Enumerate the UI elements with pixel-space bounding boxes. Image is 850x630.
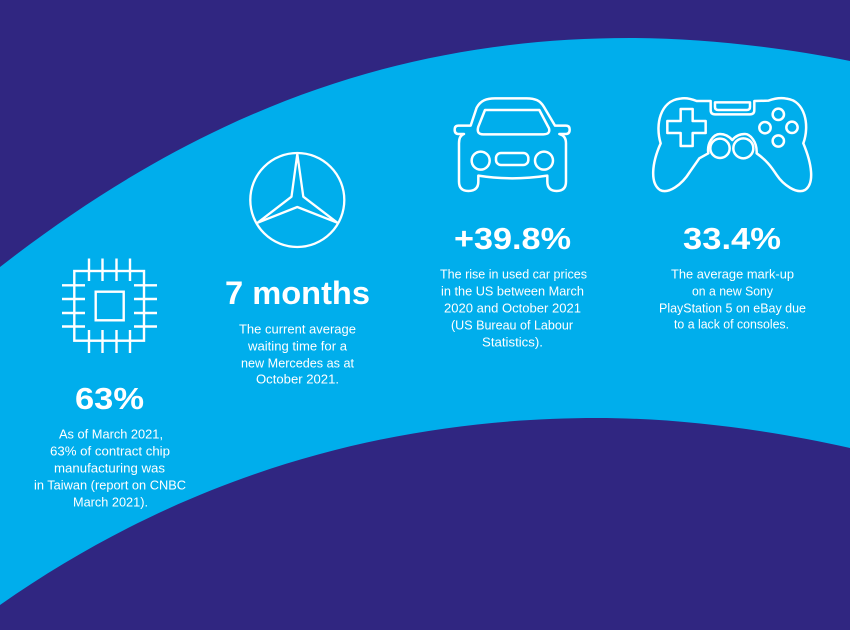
text: used car description: The rise in used car prices bbox=[440, 266, 587, 282]
heading: 33.4%: 33.4% bbox=[683, 221, 781, 256]
heading: 63%: 63% bbox=[75, 381, 144, 416]
text: used car description: 2020 and October 2021 bbox=[444, 300, 581, 316]
panel: used car statistic bbox=[440, 98, 587, 350]
text: used car description bbox=[440, 266, 587, 350]
text: Mercedes description bbox=[239, 322, 356, 386]
text: used car description: in the US between March bbox=[441, 284, 584, 298]
text: Mercedes description: October 2021. bbox=[256, 372, 339, 386]
text: used car description: Statistics). bbox=[482, 334, 543, 350]
text: used car description: (US Bureau of Labour bbox=[451, 318, 574, 332]
text: Mercedes description: waiting time for a bbox=[247, 338, 348, 354]
text: chip description: As of March 2021, bbox=[59, 426, 163, 442]
text: chip description: manufacturing was bbox=[54, 460, 165, 476]
text: PlayStation description bbox=[659, 266, 806, 332]
text: Mercedes description: The current average bbox=[239, 322, 356, 336]
text: PlayStation description: on a new Sony bbox=[692, 284, 773, 298]
text: PlayStation description: The average mark-up bbox=[671, 266, 794, 282]
text: chip description bbox=[34, 426, 186, 510]
icon: microchip bbox=[62, 258, 157, 353]
heading: 7 months: 7 months bbox=[225, 275, 370, 311]
text: chip description: in Taiwan (report on CNBC bbox=[34, 478, 186, 492]
panel: PlayStation statistic bbox=[653, 98, 811, 331]
heading: +39.8%: +39.8% bbox=[454, 221, 571, 256]
icon: car bbox=[455, 98, 570, 191]
icon: game controller bbox=[653, 98, 811, 191]
text: PlayStation description: to a lack of consoles. bbox=[674, 316, 789, 332]
panel: Mercedes statistic bbox=[225, 153, 370, 386]
text: PlayStation description: PlayStation 5 on eBay due bbox=[659, 300, 806, 316]
text: chip description: 63% of contract chip bbox=[50, 444, 170, 458]
text: Mercedes description: new Mercedes as at bbox=[241, 356, 354, 370]
text: chip description: March 2021). bbox=[73, 494, 148, 510]
icon: Mercedes star bbox=[250, 153, 344, 247]
panel: chip statistic bbox=[34, 258, 186, 510]
